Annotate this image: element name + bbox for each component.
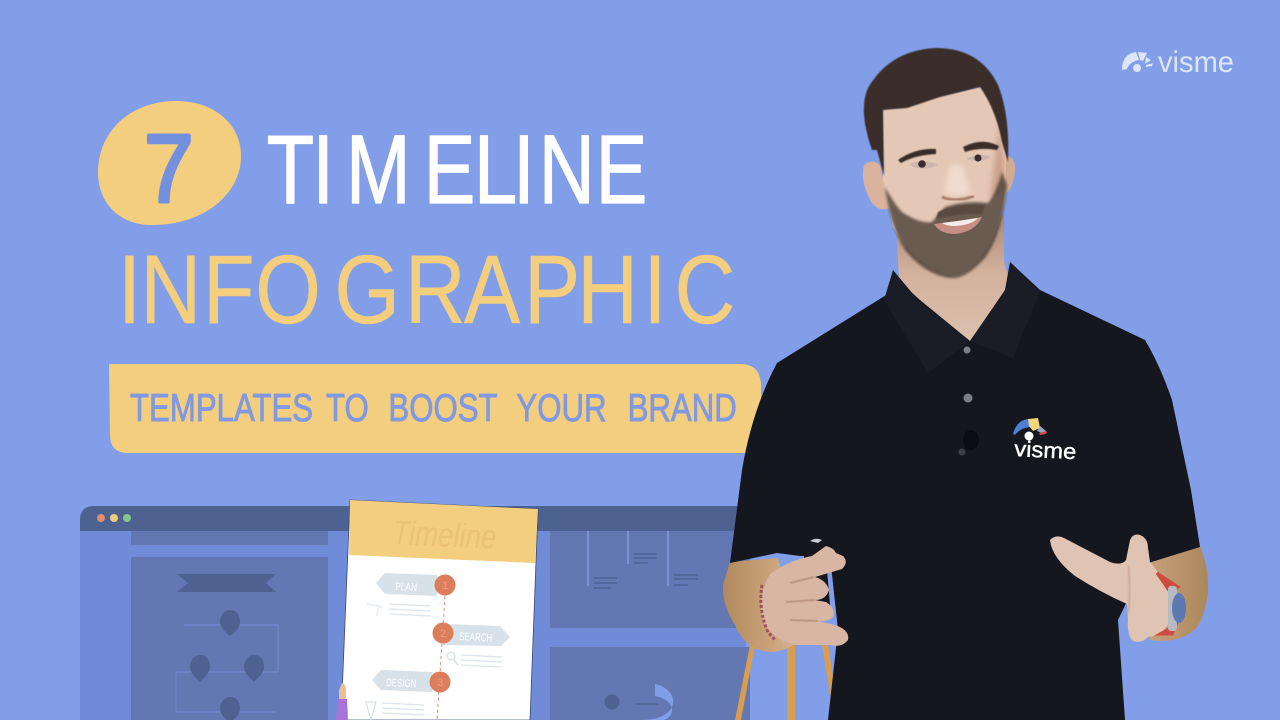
number badge: [98, 101, 241, 225]
teeth: [942, 218, 978, 226]
step 3: [366, 670, 450, 720]
mouth: [934, 217, 982, 234]
badge blob: [98, 101, 241, 225]
presenter: [723, 48, 1208, 720]
easel legs: [735, 645, 835, 720]
step 1: PLAN: [395, 581, 417, 594]
right eye: [966, 154, 991, 162]
cheek shading: [990, 120, 1006, 200]
left top bar: [131, 531, 328, 545]
character holding poster: [336, 683, 348, 720]
poster script title: Timeline: [392, 514, 497, 557]
right bottom panel: [550, 647, 750, 720]
moustache: [936, 205, 985, 219]
poster header: [349, 500, 538, 563]
neck: [896, 215, 1012, 342]
browser window illustration: [80, 506, 750, 720]
left eyebrow: [898, 149, 936, 163]
step 2: 2: [440, 628, 446, 640]
step 3: 3: [437, 677, 443, 689]
logo mark: [1122, 52, 1153, 72]
wristwatch: [1157, 573, 1186, 634]
map pin 3: [244, 655, 264, 682]
map pin 2: [190, 655, 210, 682]
window control dots: [97, 514, 131, 522]
shirt: [730, 262, 1200, 720]
step 3: DESIGN: [386, 677, 416, 690]
remote clicker: [804, 533, 830, 605]
step 1: 1: [442, 580, 448, 592]
step 1: [367, 573, 456, 616]
banner shape: [109, 364, 761, 453]
shirt logo: [1013, 418, 1077, 464]
hair: [864, 48, 1008, 176]
head: [863, 48, 1015, 278]
window body: [80, 531, 746, 720]
title: TIMELINE: TIMELINE: [267, 115, 647, 224]
beard: [885, 172, 1007, 278]
subtitle banner: [109, 364, 761, 453]
shirt logo mark: [1013, 418, 1047, 440]
connector lines: [176, 625, 278, 712]
nose shadow: [942, 196, 974, 200]
window title bar: [80, 506, 746, 531]
logo text: visme: [1158, 46, 1234, 79]
left map panel: [131, 557, 328, 720]
banner text: BOOST: [388, 387, 498, 430]
step 2: [432, 622, 510, 667]
banner text: TO: [326, 387, 369, 430]
face: [883, 85, 1006, 277]
nose: [944, 165, 970, 196]
map pin 1: [220, 610, 240, 636]
ribbon heading: [177, 574, 276, 592]
right forearm: [1145, 546, 1208, 641]
poster paper: [341, 500, 538, 720]
banner text: TEMPLATES: [130, 387, 313, 430]
right ear: [1002, 155, 1015, 195]
left eye: [909, 160, 938, 168]
right eyebrow: [963, 142, 999, 152]
banner text: YOUR: [516, 387, 606, 430]
step 2: SEARCH: [459, 631, 492, 644]
title: INFOGRAPHIC: INFOGRAPHIC: [118, 237, 735, 344]
map pin 4: [220, 697, 240, 720]
left forearm: [723, 558, 800, 652]
right top panel: [550, 531, 750, 628]
right hand: [1050, 535, 1168, 642]
dashed timeline: [437, 596, 445, 720]
shirt logo text: visme: [1014, 436, 1077, 464]
shirt buttons: [958, 346, 972, 456]
lapel microphone: [963, 430, 979, 450]
collar: [884, 262, 1040, 373]
left ear: [863, 162, 890, 209]
banner text: BRAND: [628, 387, 737, 430]
badge number 7: 7: [144, 115, 194, 223]
poster: timeline template: [341, 500, 538, 720]
left hand: [761, 546, 848, 646]
visme logo: [1122, 46, 1234, 79]
